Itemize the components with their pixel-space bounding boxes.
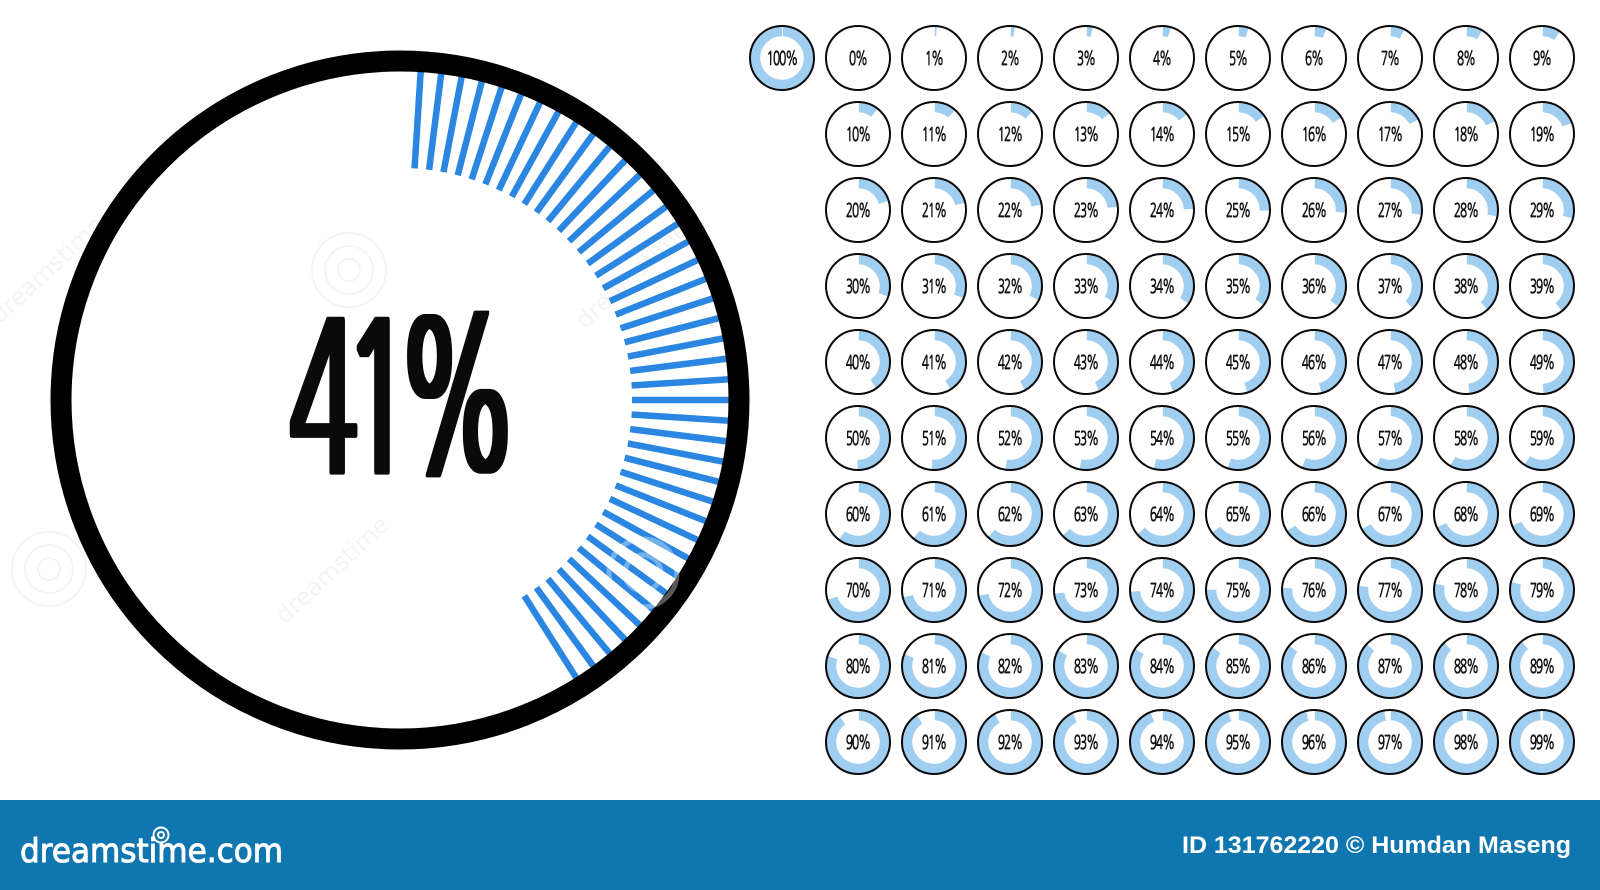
small gauge 49% [1510,330,1574,394]
small gauge 95%: 95% [1226,733,1250,753]
small gauge 45%: 45% [1226,353,1250,373]
small gauge 74%: 74% [1150,581,1174,601]
small gauge 96% [1282,710,1346,774]
small gauge 34% [1130,254,1194,318]
small gauge 7% [1358,26,1422,90]
small gauge 15%: 15% [1226,125,1250,145]
small gauge 54%: 54% [1150,429,1174,449]
small gauge 17%: 17% [1378,125,1402,145]
small gauge 20%: 20% [846,201,870,221]
small gauge 13% [1054,102,1118,166]
small gauge 56%: 56% [1302,429,1326,449]
small gauge 40% [826,330,890,394]
small gauge 69% [1510,482,1574,546]
small gauge 2% [978,26,1042,90]
small gauge 42%: 42% [998,353,1022,373]
small gauge 40%: 40% [846,353,870,373]
small gauge 64% [1130,482,1194,546]
small gauge 38%: 38% [1454,277,1478,297]
small gauge 39% [1510,254,1574,318]
small gauge 54% [1130,406,1194,470]
small gauge 6% [1282,26,1346,90]
small gauge 59% [1510,406,1574,470]
small gauge 31% [902,254,966,318]
small gauge 65%: 65% [1226,505,1250,525]
small gauge 12% [978,102,1042,166]
small gauge 66%: 66% [1302,505,1326,525]
small gauge 82% [978,634,1042,698]
small gauge 30%: 30% [846,277,870,297]
small gauge 70% [826,558,890,622]
small gauge 97% [1358,710,1422,774]
small gauge 78% [1434,558,1498,622]
small gauge 29% [1510,178,1574,242]
small gauge 92%: 92% [998,733,1022,753]
small gauge 59%: 59% [1530,429,1554,449]
small gauge 49%: 49% [1530,353,1554,373]
small gauge 91% [902,710,966,774]
small gauge 25% [1206,178,1270,242]
small gauge 14%: 14% [1150,125,1174,145]
small gauge 55%: 55% [1226,429,1250,449]
small gauge 51%: 51% [922,429,946,449]
small gauge 68% [1434,482,1498,546]
small gauge 73% [1054,558,1118,622]
small gauge 48%: 48% [1454,353,1478,373]
small gauge 85% [1206,634,1270,698]
small gauge 53% [1054,406,1118,470]
small gauge 86%: 86% [1302,657,1326,677]
small gauge 32% [978,254,1042,318]
small gauge 34%: 34% [1150,277,1174,297]
small gauge 67% [1358,482,1422,546]
small gauge 97%: 97% [1378,733,1402,753]
small gauge 57%: 57% [1378,429,1402,449]
small gauge 4% [1130,26,1194,90]
small gauge 45% [1206,330,1270,394]
small gauge 73%: 73% [1074,581,1098,601]
small gauge 78%: 78% [1454,581,1478,601]
small gauge 80% [826,634,890,698]
small gauge 37% [1358,254,1422,318]
small gauge 94%: 94% [1150,733,1174,753]
small gauge 93%: 93% [1074,733,1098,753]
small gauge 10%: 10% [846,125,870,145]
small gauge 96%: 96% [1302,733,1326,753]
small gauge 100% [750,26,814,90]
small gauge 57% [1358,406,1422,470]
small gauge 26% [1282,178,1346,242]
small gauge 38% [1434,254,1498,318]
small gauge 100%: 100% [767,49,797,69]
small gauge 0% [826,26,890,90]
small gauge 21%: 21% [922,201,946,221]
small gauge 87% [1358,634,1422,698]
small gauge 28%: 28% [1454,201,1478,221]
small gauge 24% [1130,178,1194,242]
small gauge 16%: 16% [1302,125,1326,145]
small gauge 21% [902,178,966,242]
small gauge 27% [1358,178,1422,242]
small gauge 33%: 33% [1074,277,1098,297]
small gauge 24%: 24% [1150,201,1174,221]
small gauge 50% [826,406,890,470]
small gauge 4%: 4% [1153,49,1171,69]
small gauge 67%: 67% [1378,505,1402,525]
small gauge 71%: 71% [922,581,946,601]
small gauge 62%: 62% [998,505,1022,525]
small gauge 81% [902,634,966,698]
small gauge 85%: 85% [1226,657,1250,677]
footer banner [0,800,1600,890]
small gauge 18%: 18% [1454,125,1478,145]
small gauge 72% [978,558,1042,622]
small gauge 43% [1054,330,1118,394]
small gauge 60%: 60% [846,505,870,525]
small gauge 84%: 84% [1150,657,1174,677]
small gauge 77%: 77% [1378,581,1402,601]
small gauge 12%: 12% [998,125,1022,145]
small gauge 47%: 47% [1378,353,1402,373]
small gauge 90% [826,710,890,774]
small gauge 98%: 98% [1454,733,1478,753]
small gauge 76% [1282,558,1346,622]
watermark: faint stock-photo marks: dreamstime [570,216,695,334]
small gauge 63% [1054,482,1118,546]
small gauge 84% [1130,634,1194,698]
small gauge 58%: 58% [1454,429,1478,449]
watermark: faint stock-photo marks [0,211,695,629]
small gauge 42% [978,330,1042,394]
small gauge 79%: 79% [1530,581,1554,601]
small gauge 74% [1130,558,1194,622]
watermark over ticks [609,539,677,607]
small gauge 1%: 1% [925,49,943,69]
small gauge 63%: 63% [1074,505,1098,525]
small gauge 19% [1510,102,1574,166]
small gauge 2%: 2% [1001,49,1019,69]
small gauge 79% [1510,558,1574,622]
small gauge 9% [1510,26,1574,90]
small gauge 18% [1434,102,1498,166]
small gauge 48% [1434,330,1498,394]
small gauge 62% [978,482,1042,546]
small gauge 83%: 83% [1074,657,1098,677]
small gauge 56% [1282,406,1346,470]
small gauge 44% [1130,330,1194,394]
footer brand name: dreamstime.com [20,831,283,870]
small gauge 71% [902,558,966,622]
small gauge 90%: 90% [846,733,870,753]
small gauge 46% [1282,330,1346,394]
small gauge 47% [1358,330,1422,394]
small gauge 22% [978,178,1042,242]
small gauge 30% [826,254,890,318]
small gauge 11% [902,102,966,166]
main gauge: 41 percent [61,61,739,739]
small gauge 86% [1282,634,1346,698]
small gauge 98% [1434,710,1498,774]
footer image id and credit: ID 131762220 © Humdan Maseng [1182,832,1571,859]
small gauge 28% [1434,178,1498,242]
small gauge 31%: 31% [922,277,946,297]
small gauge 37%: 37% [1378,277,1402,297]
small gauge 27%: 27% [1378,201,1402,221]
small gauge 36% [1282,254,1346,318]
small gauge 44%: 44% [1150,353,1174,373]
small gauge 23% [1054,178,1118,242]
small gauge 93% [1054,710,1118,774]
small gauge 17% [1358,102,1422,166]
small gauge 35% [1206,254,1270,318]
small gauge 81%: 81% [922,657,946,677]
small gauge 92% [978,710,1042,774]
small gauge 55% [1206,406,1270,470]
small gauge 13%: 13% [1074,125,1098,145]
small gauge 0%: 0% [849,49,867,69]
small gauge 23%: 23% [1074,201,1098,221]
small gauge 72%: 72% [998,581,1022,601]
small gauge 6%: 6% [1305,49,1323,69]
small gauge 83% [1054,634,1118,698]
small gauge 41% [902,330,966,394]
small gauge 53%: 53% [1074,429,1098,449]
small gauge 33% [1054,254,1118,318]
small gauge 14% [1130,102,1194,166]
small gauge 99%: 99% [1530,733,1554,753]
small gauge 46%: 46% [1302,353,1326,373]
small gauge 35%: 35% [1226,277,1250,297]
small gauge 87%: 87% [1378,657,1402,677]
small gauge 52% [978,406,1042,470]
small gauge 22%: 22% [998,201,1022,221]
small gauge 61% [902,482,966,546]
small gauge 19%: 19% [1530,125,1554,145]
small gauge 51% [902,406,966,470]
small gauge 5% [1206,26,1270,90]
small gauge 11%: 11% [922,125,946,145]
small gauge 75%: 75% [1226,581,1250,601]
small gauge 80%: 80% [846,657,870,677]
small gauge 82%: 82% [998,657,1022,677]
small gauge 43%: 43% [1074,353,1098,373]
main gauge ticks [415,69,732,680]
small gauge 15% [1206,102,1270,166]
small gauge 32%: 32% [998,277,1022,297]
small gauge 75% [1206,558,1270,622]
main gauge value label: 41% [290,296,518,504]
small gauge 88% [1434,634,1498,698]
main gauge black ring [61,61,739,739]
small gauge 88%: 88% [1454,657,1478,677]
small gauge 41%: 41% [922,353,946,373]
icon: spiral logo [154,828,168,842]
small gauge 8% [1434,26,1498,90]
small gauge 61%: 61% [922,505,946,525]
small gauge 95% [1206,710,1270,774]
small gauge 91%: 91% [922,733,946,753]
watermark: faint stock-photo marks: dreamstime [270,511,395,629]
small gauge 69%: 69% [1530,505,1554,525]
small gauge 7%: 7% [1381,49,1399,69]
small gauge 26%: 26% [1302,201,1326,221]
small gauge 65% [1206,482,1270,546]
small gauge 89% [1510,634,1574,698]
small gauge 60% [826,482,890,546]
small gauge 3%: 3% [1077,49,1095,69]
small gauge 89%: 89% [1530,657,1554,677]
small gauge 9%: 9% [1533,49,1551,69]
small gauge 70%: 70% [846,581,870,601]
small gauge 25%: 25% [1226,201,1250,221]
small gauge 76%: 76% [1302,581,1326,601]
small gauge 66% [1282,482,1346,546]
small gauge 50%: 50% [846,429,870,449]
small gauge 10% [826,102,890,166]
small gauge 1% [902,26,966,90]
small gauge 68%: 68% [1454,505,1478,525]
small gauge 77% [1358,558,1422,622]
small gauge 64%: 64% [1150,505,1174,525]
small gauge 29%: 29% [1530,201,1554,221]
small gauge 99% [1510,710,1574,774]
small gauge 5%: 5% [1229,49,1247,69]
small gauge 36%: 36% [1302,277,1326,297]
small gauge 52%: 52% [998,429,1022,449]
small gauge 8%: 8% [1457,49,1475,69]
small gauge 39%: 39% [1530,277,1554,297]
small gauge 16% [1282,102,1346,166]
small gauge 20% [826,178,890,242]
small gauge 58% [1434,406,1498,470]
small gauge 3% [1054,26,1118,90]
small gauge 94% [1130,710,1194,774]
